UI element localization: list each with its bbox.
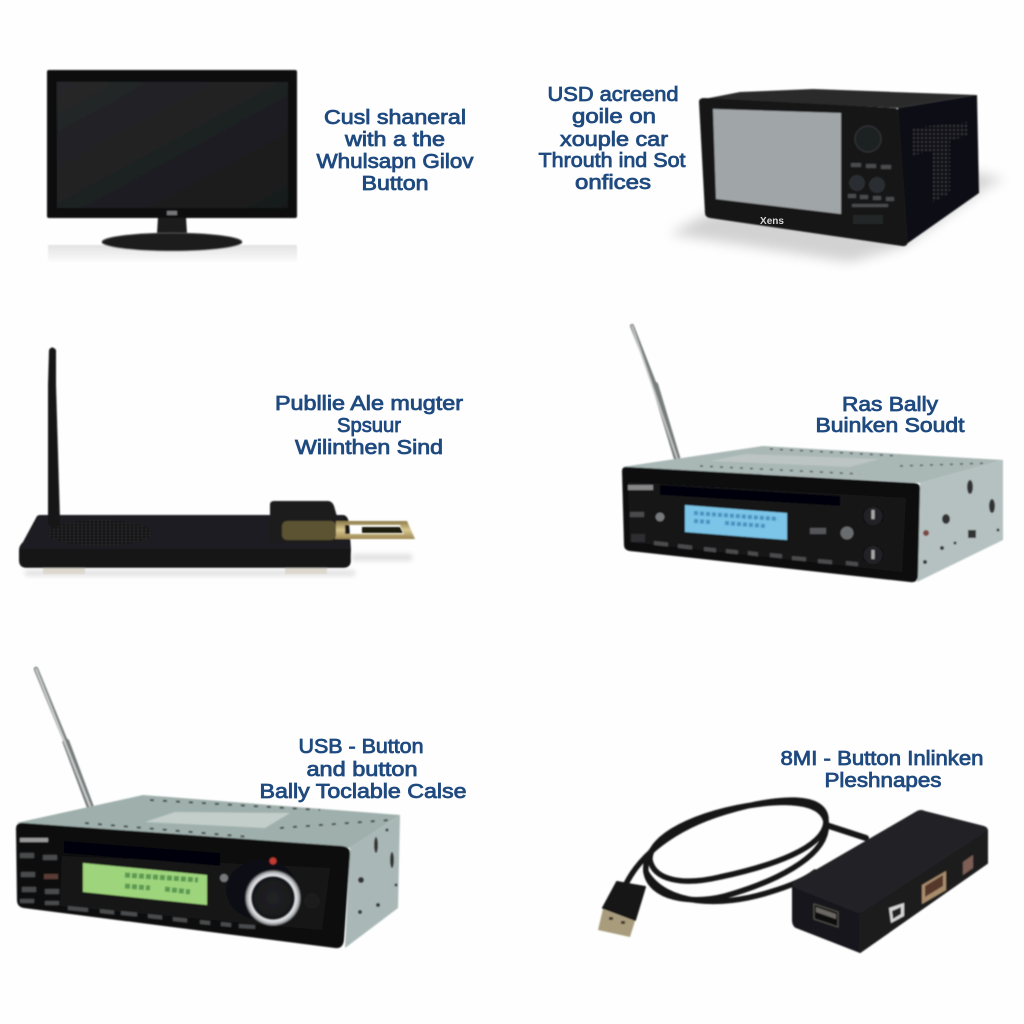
monitor base	[102, 233, 242, 251]
card reader	[270, 501, 338, 543]
label: display unit: USD acreend	[548, 84, 678, 106]
label: base with antenna: Publlie Ale mugter	[275, 393, 463, 415]
radio round buttons	[655, 506, 883, 565]
green radio small button	[220, 874, 228, 882]
USB plug contacts	[609, 917, 625, 924]
gold key slot	[362, 527, 403, 533]
monitor reflection	[48, 245, 297, 262]
hub USB port inner	[816, 907, 836, 919]
green radio antenna	[36, 669, 90, 806]
USB plug metal	[598, 909, 635, 937]
monitor bezel	[47, 70, 297, 218]
hub front face	[793, 883, 860, 952]
label: blue radio: Ras Bally	[842, 394, 938, 416]
green radio front	[16, 823, 350, 948]
panel: USB hub	[598, 800, 988, 952]
green radio top	[16, 795, 400, 848]
green radio right button	[304, 893, 320, 909]
radio side holes	[923, 480, 1000, 564]
green radio cd slot	[64, 841, 220, 866]
panel: base with antenna	[19, 348, 415, 576]
green radio panel	[60, 856, 330, 930]
display unit small knobs	[849, 175, 885, 193]
label: base with antenna: Wilinthen Sind	[295, 437, 443, 459]
hub top	[792, 810, 988, 913]
USB plug body	[603, 882, 645, 920]
label: monitor: Cusl shaneral	[324, 107, 466, 129]
radio display digits	[694, 513, 778, 526]
green radio side holes	[358, 828, 398, 914]
panel: green radio	[16, 669, 400, 948]
hub small port	[963, 855, 973, 875]
display unit top	[699, 89, 977, 108]
hub mini port	[889, 903, 904, 923]
base plate top sheen	[20, 515, 350, 549]
label: USB hub: 8MI - Button Inlinken	[780, 748, 984, 770]
label: blue radio: Buinken Soudt	[816, 415, 965, 437]
base shadow	[25, 570, 355, 576]
label: display unit	[538, 84, 686, 194]
label: monitor: Button	[362, 173, 428, 195]
hub HDMI port inner	[925, 875, 943, 897]
radio buttons	[628, 485, 858, 566]
display unit knob	[855, 126, 881, 152]
hub HDMI port	[922, 871, 946, 904]
label: monitor: with a the	[344, 129, 445, 151]
speaker grille	[48, 520, 152, 546]
label: monitor: Whulsapn Gilov	[316, 151, 474, 173]
panel: blue radio	[622, 326, 1003, 582]
monitor screen	[57, 82, 288, 208]
radio display	[685, 505, 787, 540]
label: base with antenna	[275, 393, 463, 459]
radio antenna	[632, 326, 677, 458]
green radio side	[345, 815, 400, 948]
display unit slot	[853, 215, 883, 224]
gold key body	[282, 521, 336, 540]
display unit front	[699, 98, 908, 246]
green radio label patch	[145, 812, 290, 828]
radio label patch	[710, 454, 880, 467]
green radio digits	[125, 875, 198, 892]
radio top	[622, 446, 1003, 483]
label: USB hub: Pleshnapes	[824, 770, 942, 792]
display unit shadow	[670, 172, 1005, 262]
radio top perforations	[700, 449, 990, 474]
label: display unit: xouple car	[560, 129, 668, 151]
green radio knob	[245, 870, 301, 926]
key shadow	[352, 554, 412, 561]
radio panel	[628, 482, 906, 572]
label: display unit: Throuth ind Sot	[538, 150, 686, 172]
label: green radio	[260, 736, 466, 803]
hub USB port	[814, 904, 838, 927]
green radio knob surround	[226, 860, 298, 920]
label: green radio: Bally Toclable Calse	[260, 781, 466, 803]
antenna	[48, 348, 60, 528]
label: green radio: USB - Button	[298, 736, 424, 758]
monitor badge	[167, 211, 177, 215]
base feet	[43, 567, 327, 574]
hub right face	[860, 830, 987, 952]
radio round button marks	[872, 510, 874, 559]
label: blue radio	[816, 394, 965, 437]
USB cable	[626, 800, 866, 901]
label: display unit: goile on	[572, 106, 656, 128]
label: monitor	[316, 107, 474, 195]
label: base with antenna: Spsuur	[337, 415, 401, 437]
green radio led	[270, 858, 276, 864]
green radio buttons	[20, 838, 255, 929]
monitor stand	[157, 217, 187, 234]
hub mini port inner	[892, 907, 901, 919]
label: green radio: and button	[306, 759, 418, 781]
base plate	[19, 515, 351, 568]
display unit side	[898, 95, 979, 245]
panel: display unit	[670, 89, 1005, 262]
display unit screen	[713, 109, 841, 214]
label: display unit: onfices	[575, 172, 651, 194]
label: USB hub	[780, 748, 984, 792]
display unit buttons	[848, 163, 894, 207]
radio front	[622, 467, 920, 582]
gold key	[335, 521, 415, 539]
radio cd slot	[660, 485, 840, 506]
panel: monitor	[47, 70, 297, 262]
green radio display	[83, 863, 207, 905]
display unit brand: Xens	[760, 216, 784, 227]
radio side	[917, 460, 1003, 582]
green radio top perforations	[85, 800, 390, 837]
display unit vent	[912, 122, 968, 203]
